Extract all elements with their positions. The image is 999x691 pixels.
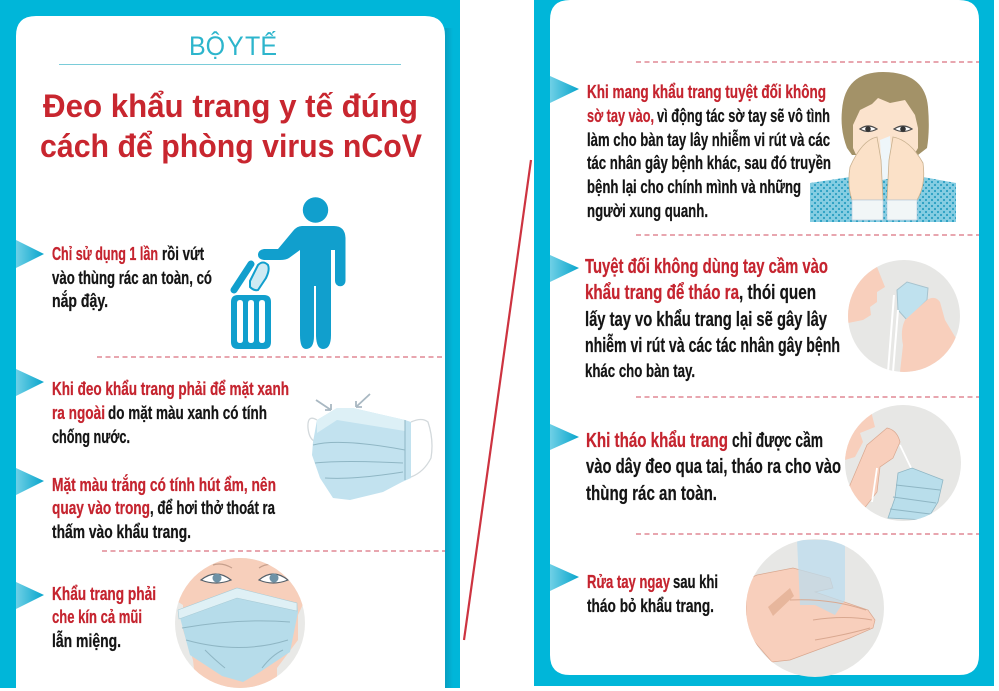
- icon: hand crumpling mask: [848, 260, 960, 372]
- item: do not hold mask: khác cho bàn tay.: [585, 361, 695, 381]
- item: use once: [16, 240, 212, 311]
- item: white side in: Mặt màu trắng có tính hút ẩm, nên: [52, 474, 276, 495]
- item: cover nose and mouth: che kín cả mũi: [52, 607, 142, 627]
- item: use once: vào thùng rác an toàn, có: [52, 268, 212, 288]
- item: use once: nắp đậy.: [52, 290, 108, 311]
- divider: [102, 550, 445, 552]
- divider: [97, 356, 445, 358]
- divider: [636, 396, 979, 398]
- divider: [636, 61, 979, 63]
- item: blue side out: [16, 369, 289, 447]
- item: cover nose and mouth: [16, 582, 156, 651]
- item: do not hold mask: khẩu trang để tháo ra: [585, 282, 740, 304]
- item: remove by ear loops: chỉ được cầm: [732, 430, 823, 452]
- divider: [636, 533, 979, 535]
- item: wash hands: sau khi: [673, 572, 718, 592]
- item: wash hands: Rửa tay ngay: [587, 572, 670, 592]
- item: do not touch: tác nhân gây bệnh khác, sau đó truyền: [587, 153, 831, 173]
- item: blue side out: do mặt màu xanh có tính: [108, 403, 267, 423]
- item: remove by ear loops: [550, 424, 841, 505]
- item: do not touch: bệnh lại cho chính mình và những: [587, 177, 801, 197]
- item: white side in: quay vào trong: [52, 498, 150, 518]
- title: [40, 88, 423, 164]
- item: white side in: [16, 468, 276, 542]
- item: do not hold mask: , thói quen: [739, 282, 816, 304]
- item: do not touch: người xung quanh.: [587, 201, 708, 221]
- item: wash hands: [550, 564, 718, 616]
- item: remove by ear loops: thùng rác an toàn.: [586, 483, 717, 505]
- title: Đeo khẩu trang y tế đúng: [43, 88, 418, 124]
- item: do not hold mask: nhiễm vi rút và các tác nhân gây bệnh: [585, 333, 840, 357]
- item: do not touch: [550, 76, 831, 221]
- item: do not hold mask: Tuyệt đối không dùng tay cầm vào: [585, 256, 828, 278]
- icon: man touching mask: [810, 72, 956, 222]
- item: do not hold mask: lấy tay vo khẩu trang lại sẽ gây lây: [585, 309, 828, 331]
- item: use once: rồi vứt: [162, 244, 204, 264]
- icon: hand holding ear loop: [845, 405, 961, 521]
- item: do not touch: sờ tay vào,: [587, 106, 654, 126]
- divider: [636, 234, 979, 236]
- item: blue side out: ra ngoài: [52, 403, 105, 423]
- item: use once: Chỉ sử dụng 1 lần: [52, 244, 158, 264]
- item: blue side out: chống nước.: [52, 427, 130, 447]
- header: ministry name: BỘ Y TẾ: [189, 30, 277, 61]
- title: cách để phòng virus nCoV: [40, 128, 423, 164]
- diagonal red divider: [464, 160, 531, 640]
- panel: left poster: [0, 0, 460, 688]
- item: do not hold mask: [550, 255, 840, 381]
- item: white side in: thấm vào khẩu trang.: [52, 522, 191, 542]
- icon: washing hands: [746, 539, 884, 677]
- item: remove by ear loops: vào dây đeo qua tai, tháo ra cho vào: [586, 456, 841, 478]
- item: cover nose and mouth: lẫn miệng.: [52, 630, 121, 651]
- item: do not touch: làm cho bàn tay lây nhiễm vi rút và các: [587, 129, 830, 150]
- item: white side in: , để hơi thở thoát ra: [150, 498, 276, 518]
- panel: right poster: [534, 0, 994, 686]
- icon: surgical mask: [308, 394, 432, 500]
- icon: face wearing mask: [175, 558, 305, 688]
- item: wash hands: tháo bỏ khẩu trang.: [587, 596, 714, 616]
- item: do not touch: Khi mang khẩu trang tuyệt đối không: [587, 82, 826, 102]
- item: blue side out: Khi đeo khẩu trang phải để mặt xanh: [52, 379, 289, 399]
- item: remove by ear loops: Khi tháo khẩu trang: [586, 430, 728, 452]
- icon: person throwing mask in bin: [231, 197, 346, 349]
- item: do not touch: vì động tác sờ tay sẽ vô tình: [657, 106, 830, 126]
- item: cover nose and mouth: Khẩu trang phải: [52, 584, 156, 604]
